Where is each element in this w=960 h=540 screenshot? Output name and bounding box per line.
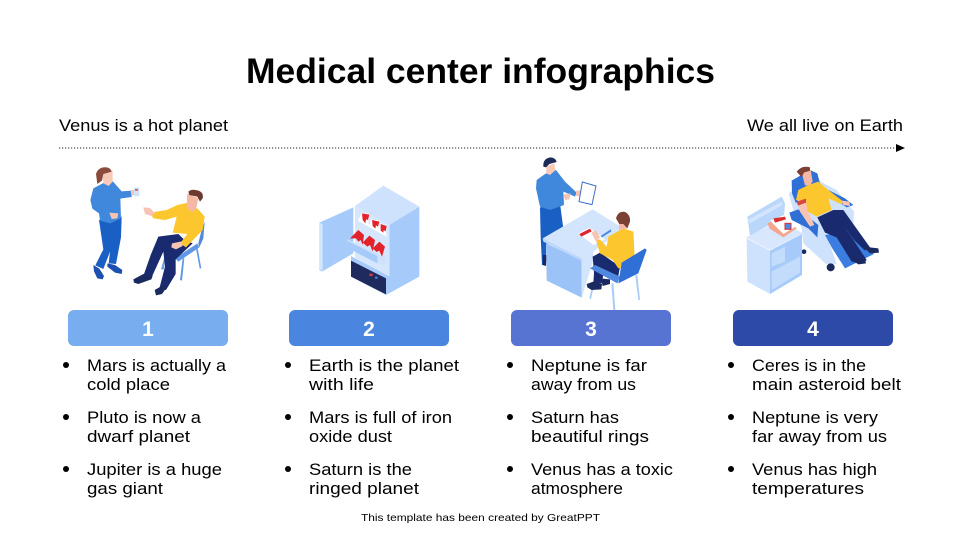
chair	[789, 180, 854, 264]
bullet list 3: beautiful rings	[531, 427, 649, 446]
bullet list 2: with life	[308, 375, 374, 394]
bullet list 1: cold place	[87, 375, 170, 394]
right timeline label: We all live on Earth	[747, 116, 903, 135]
bullet list 4: Neptune is very	[752, 408, 879, 427]
timeline arrow	[59, 144, 905, 152]
bullet list 2: ringed planet	[309, 479, 419, 498]
bullet list 3	[507, 356, 674, 498]
clipboard	[579, 182, 596, 205]
step bar 1: 1	[142, 318, 154, 341]
cabinet	[747, 197, 785, 236]
bullet list 3: Neptune is far	[531, 356, 647, 375]
man	[161, 253, 165, 269]
bullet list 1: Jupiter is a huge	[87, 460, 222, 479]
title: Medical center infographics	[246, 52, 715, 91]
step bar 2: 2	[363, 318, 375, 341]
step bar 1	[68, 310, 228, 346]
bullet list 1: dwarf planet	[87, 427, 190, 446]
bullet list 1: gas giant	[87, 479, 163, 498]
man	[817, 210, 870, 264]
bullet list 4: Venus has high	[752, 460, 877, 479]
bullet list 2: oxide dust	[309, 427, 392, 446]
step bar 3	[511, 310, 671, 346]
lower shelf	[347, 239, 387, 265]
open door	[319, 207, 353, 272]
left timeline label: Venus is a hot planet	[59, 116, 228, 135]
bullet list 3: away from us	[531, 375, 636, 394]
woman	[95, 217, 122, 269]
bullet list 3: Saturn has	[531, 408, 619, 427]
bullet list 4: temperatures	[752, 479, 864, 498]
bullet list 2: Mars is full of iron	[309, 408, 452, 427]
upper shelf of blood bags	[358, 218, 387, 237]
paper	[578, 228, 605, 245]
icon: patient in blood donation chair	[746, 167, 879, 294]
bullet list 1: Mars is actually a	[87, 356, 227, 375]
bullet list 4: Ceres is in the	[752, 356, 866, 375]
step bar 3: 3	[585, 318, 597, 341]
bullet list 2: Saturn is the	[309, 460, 412, 479]
doctor	[540, 203, 563, 265]
bullet list 3: atmosphere	[531, 479, 623, 498]
base control panel	[351, 261, 386, 294]
bullet list 2	[285, 356, 459, 498]
bullet list 4: far away from us	[752, 427, 887, 446]
patient	[593, 253, 620, 283]
icon: doctor and patient at desk	[536, 157, 647, 310]
step bar 4	[733, 310, 893, 346]
bullet list 1	[63, 356, 227, 498]
step bar 2	[289, 310, 449, 346]
machine	[768, 215, 797, 237]
icon: nurse talking to seated patient	[90, 167, 205, 295]
bullet list 3: Venus has a toxic	[531, 460, 674, 479]
step bar 4: 4	[807, 318, 819, 341]
bullet list 4: main asteroid belt	[752, 375, 901, 394]
chair	[589, 278, 596, 299]
desk	[546, 243, 582, 298]
bullet list 2: Earth is the planet	[309, 356, 459, 375]
icon: blood storage fridge	[319, 186, 419, 295]
footer credit: This template has been created by GreatPPT	[361, 512, 601, 524]
bullet list 1: Pluto is now a	[87, 408, 202, 427]
bullet list 4	[728, 356, 901, 498]
